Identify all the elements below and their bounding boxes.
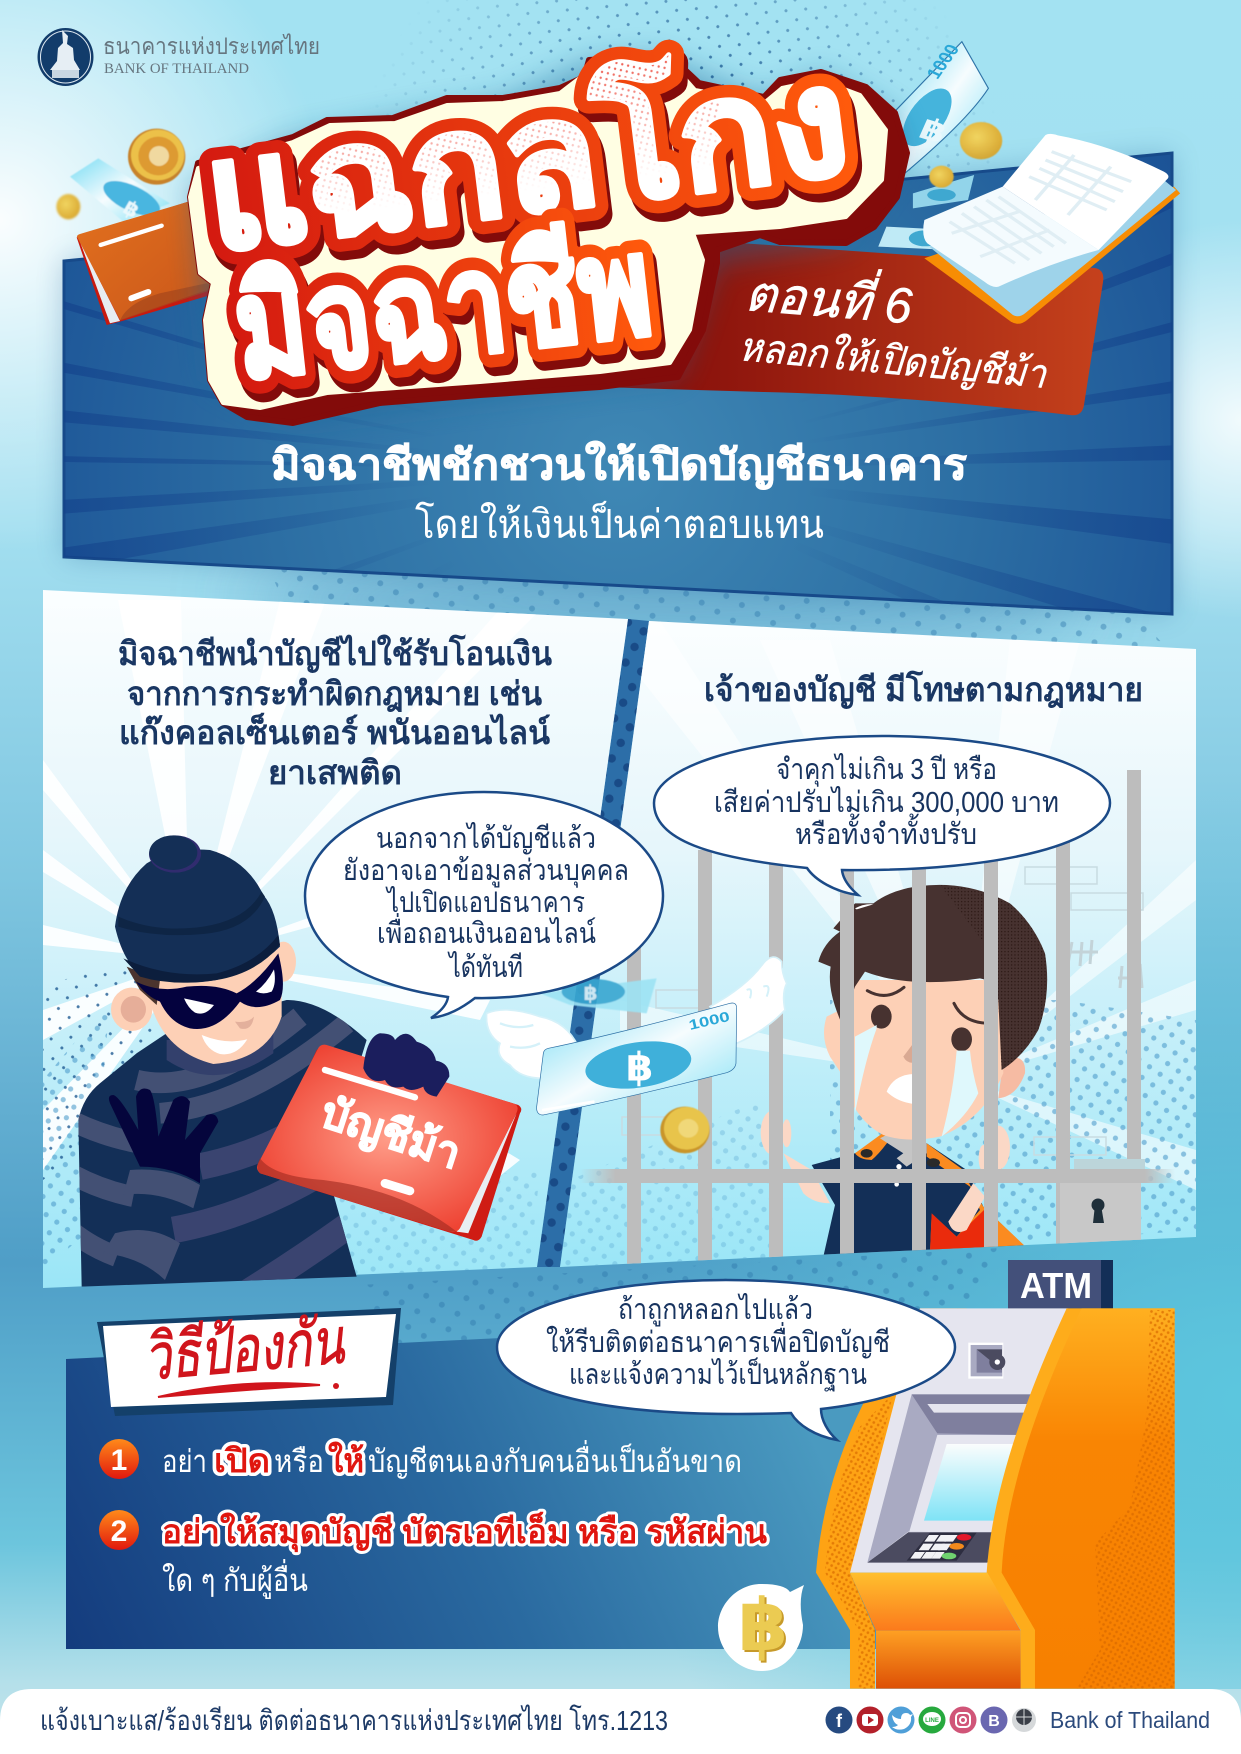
icon: red mule-account passbook (257, 1033, 521, 1241)
panel: prevention (66, 1305, 1000, 1649)
item 1: เปิด (214, 1442, 270, 1479)
headline text: มิจฉาชีพชักชวนให้เปิดบัญชีธนาคาร (271, 440, 967, 490)
wing right (710, 957, 787, 1043)
panel: left, thief (43, 590, 640, 1293)
padlock (1060, 1159, 1145, 1244)
speech bubble: bottom: ให้รีบติดต่อธนาคารเพื่อปิดบัญชี (546, 1322, 890, 1359)
speech bubble: bottom: และแจ้งความไว้เป็นหลักฐาน (569, 1356, 867, 1392)
icon: banknote top right: 1000 (922, 41, 964, 82)
tag: prevention heading: วิธีป้องกัน (141, 1305, 348, 1394)
speech bubble: right: จำคุกไม่เกิน 3 ปี หรือ (776, 752, 997, 787)
item 2: อย่าให้สมุดบัญชี บัตรเอทีเอ็ม หรือ รหัสผ่าน (162, 1511, 767, 1553)
screen recess (867, 1394, 1033, 1563)
left panel heading: มิจฉาชีพนำบัญชีไปใช้รับโอนเงิน (118, 634, 552, 673)
ears and neck (824, 1012, 840, 1072)
sign: ATM (1008, 1260, 1113, 1310)
dotted band behind panels (240, 525, 1196, 1345)
icon: red mule-account passbook: บัญชีม้า (315, 1089, 466, 1180)
sweater (70, 993, 373, 1293)
vertical dotted strip between panels (537, 619, 649, 1267)
item 1: ให้ (328, 1441, 364, 1479)
blurred note (540, 978, 657, 1013)
headline text (271, 440, 967, 547)
left panel heading: แก๊งคอลเซ็นเตอร์ พนันออนไลน์ (119, 712, 550, 751)
speech bubble: bottom (497, 1280, 955, 1440)
wing left (487, 1010, 578, 1078)
left panel heading: ยาเสพติด (268, 754, 402, 791)
face (854, 980, 1004, 1140)
panel: top blue banner (60, 153, 1180, 620)
illustration: ATM machine (816, 1308, 1175, 1689)
item 2: อย่าให้สมุดบัญชี บัตรเอทีเอ็ม หรือ รหัสผ่าน (162, 1511, 767, 1553)
right panel heading: เจ้าของบัญชี มีโทษตามกฎหมาย (704, 670, 1143, 709)
icon: banknote top right: ฿ (914, 112, 952, 151)
nose and mouth (904, 1045, 912, 1063)
title line 2: มิจฉาชีพ (227, 209, 659, 408)
footer contact text: แจ้งเบาะแส/ร้องเรียน ติดต่อธนาคารแห่งประเทศไทย โทร.1213 (40, 1704, 668, 1736)
item 1 (99, 1439, 742, 1479)
banknote body (537, 1003, 737, 1115)
icon: banknote top right (893, 41, 988, 173)
winged banknote: ฿ (626, 1046, 653, 1090)
footer (0, 1689, 1241, 1754)
title line 1: แฉกลโกง (196, 33, 857, 282)
icon: wallet, note and coins on the left (56, 129, 217, 325)
decorative money behind title (893, 41, 1002, 173)
headline text: โดยให้เงินเป็นค่าตอบแทน (415, 500, 824, 547)
speech bubble: right: หรือทั้งจำทั้งปรับ (795, 813, 977, 851)
note cluster and small coin behind book (878, 166, 974, 250)
machine body (850, 1308, 1068, 1573)
left panel heading (118, 634, 552, 791)
hands (783, 1153, 830, 1203)
icon: small banknote: ฿ (119, 196, 143, 223)
icon: open bank passbook (923, 134, 1180, 324)
tears (855, 1025, 877, 1113)
social icons: B (988, 1713, 1000, 1730)
speech bubble: left: ยังอาจเอาข้อมูลส่วนบุคคล (343, 855, 629, 888)
head and face (111, 988, 152, 1031)
item 1: อย่า (162, 1444, 207, 1479)
social icons: f (836, 1711, 843, 1731)
speech bubble: left: นอกจากได้บัญชีแล้ว (376, 821, 596, 855)
panel: right, jail (560, 590, 1196, 1270)
sign: ATM: ATM (1020, 1265, 1092, 1306)
left panel heading: จากการกระทำผิดกฎหมาย เช่น (127, 675, 542, 712)
title line 2: มิจฉาชีพ (227, 209, 659, 408)
item 2 (99, 1510, 767, 1599)
icon: coin (128, 129, 185, 185)
sleeve stripes (123, 1169, 200, 1208)
title line 1: แฉกลโกง (196, 33, 857, 282)
item 1: บัญชีตนเองกับคนอื่นเป็นอันขาด (368, 1440, 742, 1479)
item 1: 1 (111, 1444, 127, 1477)
shirt (812, 1137, 1027, 1257)
title: แฉกลโกง มิจฉาชีพ (190, 33, 907, 423)
ribbon: episode label (600, 243, 1103, 415)
logo: Bank of Thailand (38, 28, 320, 86)
footer brand name: Bank of Thailand (1050, 1707, 1210, 1733)
winged banknote (487, 957, 787, 1153)
speech bubble: left: ได้ทันที (447, 950, 523, 984)
social icons: LINE (925, 1718, 939, 1724)
episode title text: หลอกให้เปิดบัญชีม้า (737, 324, 1049, 398)
coin (660, 1107, 710, 1153)
mask (136, 953, 283, 1029)
right orange casing (987, 1308, 1175, 1689)
episode number text: ตอนที่ 6 (743, 258, 915, 334)
speech bubble: right: เสียค่าปรับไม่เกิน 300,000 บาท (714, 785, 1059, 819)
keypad (867, 1532, 993, 1563)
eyes and brows (867, 987, 904, 995)
tag: prevention heading (97, 1305, 401, 1416)
item 1: เปิด (214, 1442, 270, 1479)
winged banknote: 1000 (687, 1008, 732, 1033)
item 1: หรือ (274, 1444, 324, 1479)
speech bubble: left: ไปเปิดแอปธนาคาร (385, 885, 585, 919)
hair (818, 885, 1047, 1070)
speech bubble: bottom: ถ้าถูกหลอกไปแล้ว (618, 1292, 813, 1327)
title dark silhouette (190, 55, 907, 423)
logo: Bank of Thailand: BANK OF THAILAND (104, 61, 249, 77)
logo: Bank of Thailand: ธนาคารแห่งประเทศไทย (103, 33, 320, 59)
left orange strip (816, 1308, 967, 1689)
speech bubble: left (305, 792, 663, 1018)
camera (968, 1343, 1003, 1379)
icon: baht speech bubble: ฿ (738, 1586, 788, 1666)
title line 1: แฉกลโกง (196, 33, 857, 282)
icon: baht speech bubble: ฿ (740, 1588, 790, 1668)
icon: baht speech bubble (718, 1584, 804, 1671)
title line 1: แฉกลโกง (200, 42, 861, 290)
title line 2: มิจฉาชีพ (231, 218, 663, 416)
speech bubble: left: เพื่อถอนเงินออนไลน์ (377, 913, 596, 950)
social icons (826, 1706, 1036, 1734)
front shelf (850, 1573, 1021, 1631)
jail bars (580, 770, 1175, 1270)
blurred note: ฿ (583, 982, 598, 1005)
beanie hat (115, 849, 280, 983)
speech bubble: right (654, 736, 1110, 895)
item 2: 2 (111, 1515, 127, 1548)
icon: small banknote (70, 158, 170, 223)
title cream backdrop (190, 62, 886, 408)
item 1: ให้ (328, 1441, 364, 1479)
left hand glove (109, 1088, 218, 1183)
character: prisoner (761, 885, 1047, 1257)
character: thief (70, 835, 373, 1293)
item 2: ใด ๆ กับผู้อื่น (162, 1559, 308, 1599)
title shadow glow (190, 55, 907, 423)
icon: gold coin (960, 122, 1002, 159)
